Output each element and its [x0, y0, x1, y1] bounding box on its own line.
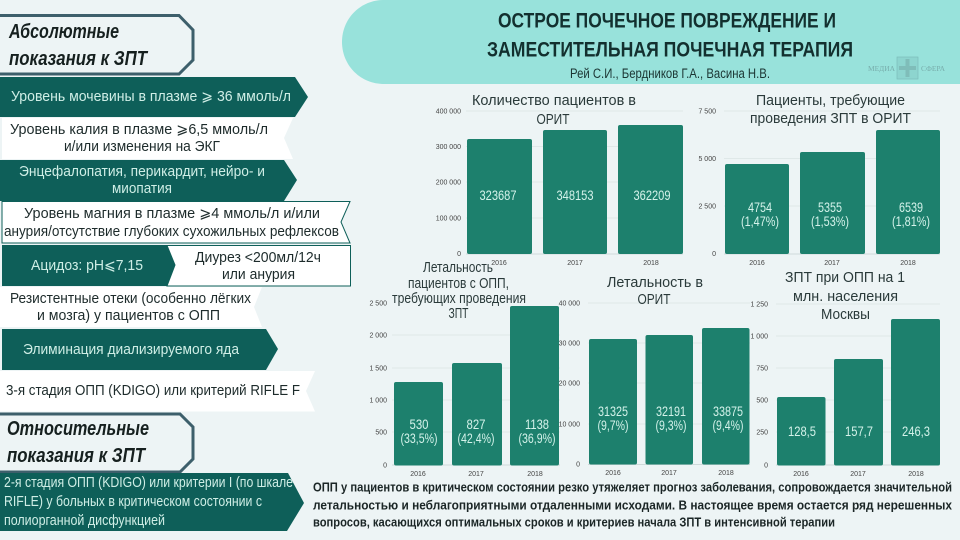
conclusion text — [313, 480, 953, 530]
chart: ICU mortality: (9,4%) — [712, 417, 744, 433]
chart: mortality of AKI patients requiring RRT: Летальность — [423, 259, 493, 276]
chart: patients requiring RRT: (1,81%) — [892, 213, 930, 229]
chart: patients requiring RRT: 5355 — [818, 199, 842, 215]
chart: mortality of AKI patients requiring RRT: 530 — [410, 416, 429, 432]
ribbon: oedema: Резистентные отеки (особенно лёгких — [10, 290, 251, 307]
chart: ICU mortality: 2017 — [661, 470, 677, 477]
chart: RRT in AKI per 1 million Moscow population: 1 000 — [750, 334, 768, 340]
chart: RRT in AKI per 1 million Moscow population: 157,7 — [845, 423, 873, 439]
chart: RRT in AKI per 1 million Moscow population — [750, 269, 940, 478]
chart: mortality of AKI patients requiring RRT: 1 000 — [369, 398, 387, 404]
chart: patients requiring RRT: 4754 — [748, 199, 772, 215]
chart: RRT in AKI per 1 million Moscow population: 750 — [756, 366, 768, 372]
ribbon: stage 2: RIFLE) у больных в критическом состоянии с — [4, 493, 262, 510]
chart: mortality of AKI patients requiring RRT: (36,9%) — [518, 430, 556, 446]
chart: RRT in AKI per 1 million Moscow population: 2018 — [908, 471, 924, 478]
chart: patients in ICU: 0 — [457, 251, 461, 258]
panel: absolute indications heading: показания к ЗПТ — [9, 48, 148, 70]
ribbon: potassium: и/или изменения на ЭКГ — [64, 138, 220, 155]
ribbon: stage 2: 2-я стадия ОПП (KDIGO) или критерии I (по шкале — [4, 474, 293, 491]
panel: relative indications heading: показания к ЗПТ — [7, 445, 146, 467]
chart: patients in ICU: 2016 — [491, 260, 507, 267]
chart: patients in ICU: 100 000 — [436, 216, 461, 222]
ribbon: magnesium: Уровень магния в плазме ⩾4 ммоль/л и/или — [24, 205, 320, 222]
ribbon: stage 2: полиорганной дисфункцией — [4, 512, 165, 529]
ribbon: urea: Уровень мочевины в плазме ⩾ 36 ммоль/л — [11, 88, 291, 105]
chart: mortality of AKI patients requiring RRT: 827 — [466, 416, 486, 432]
chart: patients requiring RRT: 6539 — [899, 199, 923, 215]
chart: mortality of AKI patients requiring RRT: 1 500 — [369, 366, 387, 372]
chart: mortality of AKI patients requiring RRT: 500 — [375, 430, 387, 436]
chart: ICU mortality: Летальность в — [607, 274, 703, 291]
chart: RRT in AKI per 1 million Moscow population: 500 — [756, 398, 768, 404]
authors: Рей С.И., Бердников Г.А., Васина Н.В. — [570, 66, 770, 81]
logo: Медиа Сфера: МЕДИА — [868, 64, 896, 73]
chart: ICU mortality: 2018 — [718, 470, 734, 477]
chart: patients in ICU: 400 000 — [436, 108, 461, 116]
chart: mortality of AKI patients requiring RRT: пациентов с ОПП, — [408, 275, 509, 292]
chart: patients in ICU — [436, 92, 683, 267]
chart: patients requiring RRT: (1,47%) — [741, 213, 779, 229]
chart: patients requiring RRT: 2017 — [824, 260, 840, 267]
chart: patients requiring RRT: 7 500 — [698, 108, 716, 116]
chart: patients in ICU: ОРИТ — [536, 111, 570, 128]
ribbon: oedema — [0, 287, 262, 327]
panel: relative indications heading — [0, 414, 193, 472]
chart: patients in ICU: 300 000 — [436, 144, 461, 151]
ribbon: acidosis and diuresis: Ацидоз: pH⩽7,15 — [31, 257, 143, 274]
chart: patients in ICU: 362209 — [634, 187, 671, 203]
title: ЗАМЕСТИТЕЛЬНАЯ ПОЧЕЧНАЯ ТЕРАПИЯ — [487, 38, 853, 62]
chart: patients requiring RRT: 5 000 — [698, 156, 716, 163]
ribbon: toxin elimination: Элиминация диализируемого яда — [23, 341, 240, 358]
chart: mortality of AKI patients requiring RRT: 2017 — [468, 471, 484, 478]
ribbon: magnesium — [2, 202, 350, 243]
chart: RRT in AKI per 1 million Moscow population: 250 — [756, 430, 768, 436]
ribbon: stage 3: 3-я стадия ОПП (KDIGO) или критерий RIFLE F — [6, 382, 300, 399]
header banner — [342, 0, 960, 84]
ribbon: potassium: Уровень калия в плазме ⩾6,5 ммоль/л — [10, 121, 268, 138]
chart: ICU mortality: 2016 — [605, 470, 621, 477]
chart: patients requiring RRT: 0 — [712, 251, 716, 258]
chart: mortality of AKI patients requiring RRT: требующих проведения — [392, 290, 526, 307]
ribbon: encephalopathy: миопатия — [112, 180, 172, 197]
chart: ICU mortality: ОРИТ — [638, 291, 670, 308]
conclusion text: вопросов, касающихся оптимальных сроков и критериев начала ЗПТ в интенсивной терапии — [313, 514, 835, 530]
chart: RRT in AKI per 1 million Moscow population: 128,5 — [788, 423, 816, 439]
logo: Медиа Сфера — [868, 57, 946, 79]
chart: mortality of AKI patients requiring RRT: 2016 — [410, 471, 426, 478]
ribbon: oedema: и мозга) у пациентов с ОПП — [37, 307, 220, 324]
chart: ICU mortality: (9,7%) — [598, 417, 628, 433]
chart: ICU mortality: (9,3%) — [656, 417, 686, 433]
chart: RRT in AKI per 1 million Moscow population: ЗПТ при ОПП на 1 — [785, 269, 905, 286]
chart: mortality of AKI patients requiring RRT: 2 000 — [369, 332, 387, 340]
ribbon: urea — [0, 77, 308, 117]
chart: patients requiring RRT: 2016 — [749, 260, 765, 267]
chart: mortality of AKI patients requiring RRT: 1138 — [525, 416, 549, 432]
chart: patients requiring RRT: (1,53%) — [811, 213, 849, 229]
chart: mortality of AKI patients requiring RRT: 2 500 — [369, 300, 387, 308]
panel: absolute indications heading — [0, 16, 193, 74]
title: ОСТРОЕ ПОЧЕЧНОЕ ПОВРЕЖДЕНИЕ И — [498, 10, 836, 32]
ribbon: encephalopathy — [0, 160, 297, 201]
chart: RRT in AKI per 1 million Moscow population: 246,3 — [902, 423, 930, 439]
ribbon: acidosis and diuresis — [2, 245, 350, 286]
ribbon: acidosis and diuresis: Диурез <200мл/12ч — [195, 249, 321, 266]
chart: mortality of AKI patients requiring RRT: (33,5%) — [400, 430, 438, 446]
chart: ICU mortality: 33875 — [713, 403, 743, 419]
chart: patients requiring RRT: 2 500 — [698, 204, 716, 210]
chart: RRT in AKI per 1 million Moscow population: 2016 — [793, 471, 809, 478]
chart: patients requiring RRT: проведения ЗПТ в ОРИТ — [750, 110, 911, 127]
chart: ICU mortality: 30 000 — [559, 340, 580, 348]
ribbon: stage 2 — [0, 473, 304, 531]
panel: absolute indications heading: Абсолютные — [8, 21, 119, 43]
chart: patients requiring RRT: 2018 — [900, 260, 916, 267]
ribbon: potassium — [2, 118, 293, 159]
chart: RRT in AKI per 1 million Moscow population: 0 — [764, 462, 768, 470]
chart: ICU mortality: 40 000 — [559, 300, 580, 308]
chart: patients in ICU: 323687 — [480, 187, 517, 203]
ribbon: encephalopathy: Энцефалопатия, перикардит, нейро- и — [19, 163, 265, 180]
chart: patients in ICU: 348153 — [556, 187, 594, 203]
chart: mortality of AKI patients requiring RRT: (42,4%) — [458, 430, 494, 446]
chart: ICU mortality: 20 000 — [559, 380, 580, 388]
chart: patients in ICU: Количество пациентов в — [472, 92, 636, 109]
chart: mortality of AKI patients requiring RRT: ЗПТ — [448, 305, 468, 322]
chart: patients requiring RRT — [698, 92, 940, 267]
chart: ICU mortality: 31325 — [598, 403, 628, 419]
chart: patients in ICU: 2018 — [643, 260, 659, 267]
chart: patients requiring RRT: Пациенты, требующие — [756, 92, 905, 109]
chart: RRT in AKI per 1 million Moscow population: 2017 — [850, 471, 866, 478]
title — [487, 10, 853, 62]
chart: RRT in AKI per 1 million Moscow population: Москвы — [821, 306, 870, 323]
chart: RRT in AKI per 1 million Moscow population: 1 250 — [750, 302, 768, 308]
chart: ICU mortality: 0 — [576, 462, 580, 468]
chart: ICU mortality: 10 000 — [559, 422, 580, 428]
ribbon: acidosis and diuresis: или анурия — [222, 266, 295, 283]
ribbon: stage 3 — [0, 371, 315, 412]
logo: Медиа Сфера: СФЕРА — [921, 64, 946, 73]
ribbon: toxin elimination — [2, 329, 278, 370]
chart: ICU mortality: 32191 — [656, 403, 686, 419]
chart: mortality of AKI patients requiring RRT: 2018 — [527, 471, 543, 478]
chart: mortality of AKI patients requiring RRT: 0 — [383, 462, 387, 470]
chart: mortality of AKI patients requiring RRT — [369, 259, 560, 478]
ribbon: magnesium: анурия/отсутствие глубоких сухожильных рефлексов — [4, 223, 339, 240]
panel: relative indications heading: Относительные — [7, 418, 149, 440]
chart: patients in ICU: 200 000 — [436, 180, 461, 186]
chart: ICU mortality — [559, 274, 750, 477]
chart: patients in ICU: 2017 — [567, 260, 583, 267]
chart: RRT in AKI per 1 million Moscow population: млн. населения — [793, 288, 898, 305]
